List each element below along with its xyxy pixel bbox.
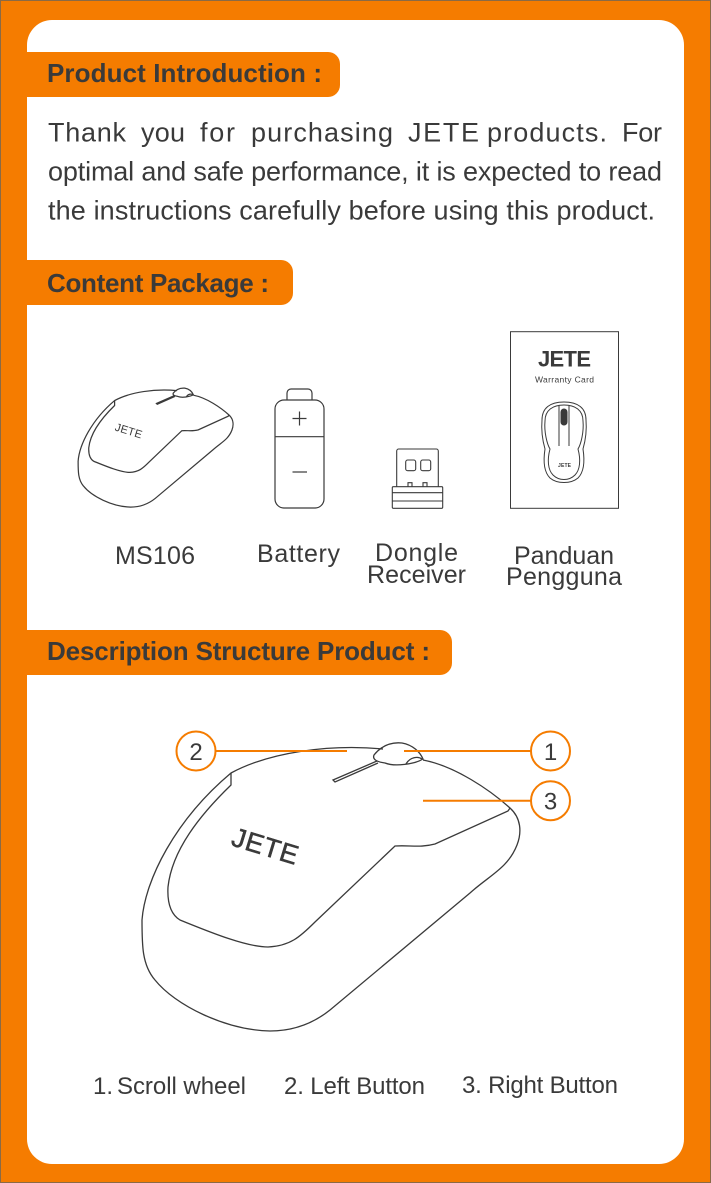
label: Battery: Battery [257, 540, 340, 568]
icon: warranty card: JETE [538, 346, 591, 372]
label: Panduan Pengguna: Pengguna [506, 563, 622, 591]
legend: left button: 2. Left Button [284, 1073, 425, 1100]
icon: small mouse: JETE [113, 422, 143, 441]
heading: Description Structure Product [27, 630, 452, 675]
callout 3: right button [423, 781, 570, 820]
label: Panduan Pengguna: Panduan [514, 542, 614, 570]
text block: introduction: For [622, 118, 662, 148]
icon: warranty card [510, 332, 618, 508]
icon: warranty card: Warranty Card [535, 374, 594, 384]
callout 2: left button [176, 732, 347, 770]
legend: scroll wheel: 1. [93, 1073, 113, 1100]
legend: right button: 3. Right Button [462, 1072, 618, 1099]
icon: dongle receiver [392, 449, 443, 508]
icon: warranty card: JETE [558, 463, 572, 469]
label: Dongle Receiver: Dongle [375, 539, 458, 567]
text block: introduction: optimal and safe performance, it is expected to read [48, 156, 662, 186]
legend: scroll wheel: Scroll wheel [117, 1073, 246, 1100]
text block: introduction: products. [487, 118, 607, 148]
heading: Description Structure Product: Description Structure Product : [47, 636, 430, 666]
text block: introduction: Thank [48, 118, 126, 148]
icon: battery [275, 389, 324, 508]
large mouse diagram [142, 743, 520, 1031]
callout 1: scroll wheel: 1 [544, 739, 557, 766]
text block: introduction: the instructions carefully before using this product. [48, 196, 655, 226]
text block: introduction: for [200, 118, 235, 148]
heading: Content Package [27, 260, 293, 305]
callout 1: scroll wheel [404, 732, 570, 770]
callout 2: left button: 2 [189, 739, 203, 766]
text block: introduction: you [141, 118, 185, 148]
heading: Content Package: Content Package : [47, 268, 269, 298]
heading: Product Introduction: Product Introduction : [47, 58, 322, 88]
label: MS106: MS106 [115, 542, 195, 570]
label: Dongle Receiver: Receiver [367, 561, 466, 589]
callout 3: right button: 3 [544, 788, 557, 816]
text block: introduction: purchasing [251, 118, 393, 148]
heading: Product Introduction [27, 52, 340, 97]
icon: small mouse [78, 388, 233, 507]
mouse logo: JETE [228, 822, 302, 871]
text block: introduction: JETE [408, 118, 479, 148]
